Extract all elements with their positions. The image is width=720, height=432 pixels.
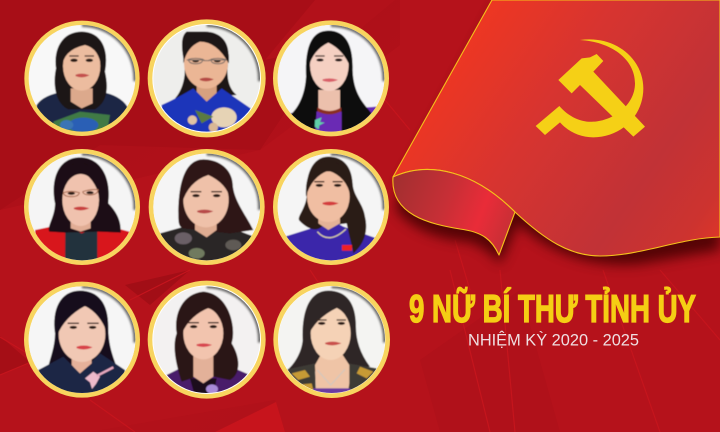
icon: hammer and sickle xyxy=(536,39,645,137)
portraits top two rows xyxy=(26,22,388,263)
portrait 5 xyxy=(151,151,262,263)
flag curl xyxy=(393,170,515,255)
flag shadow xyxy=(396,0,720,265)
portrait 8 xyxy=(150,283,263,397)
sickle xyxy=(536,39,643,137)
subtitle: NHIỆM KỲ 2020 - 2025 xyxy=(468,330,639,350)
flag body xyxy=(393,0,720,256)
portrait 1 xyxy=(27,23,137,134)
portraits bottom row xyxy=(26,283,388,397)
portrait 6 xyxy=(275,151,388,263)
portrait 3 xyxy=(273,23,387,134)
portrait 4 xyxy=(26,151,140,263)
portrait 7 xyxy=(26,284,140,395)
hammer xyxy=(558,54,645,137)
portrait 9 xyxy=(275,283,388,397)
party flag xyxy=(393,0,720,256)
portrait 2 xyxy=(150,22,263,135)
